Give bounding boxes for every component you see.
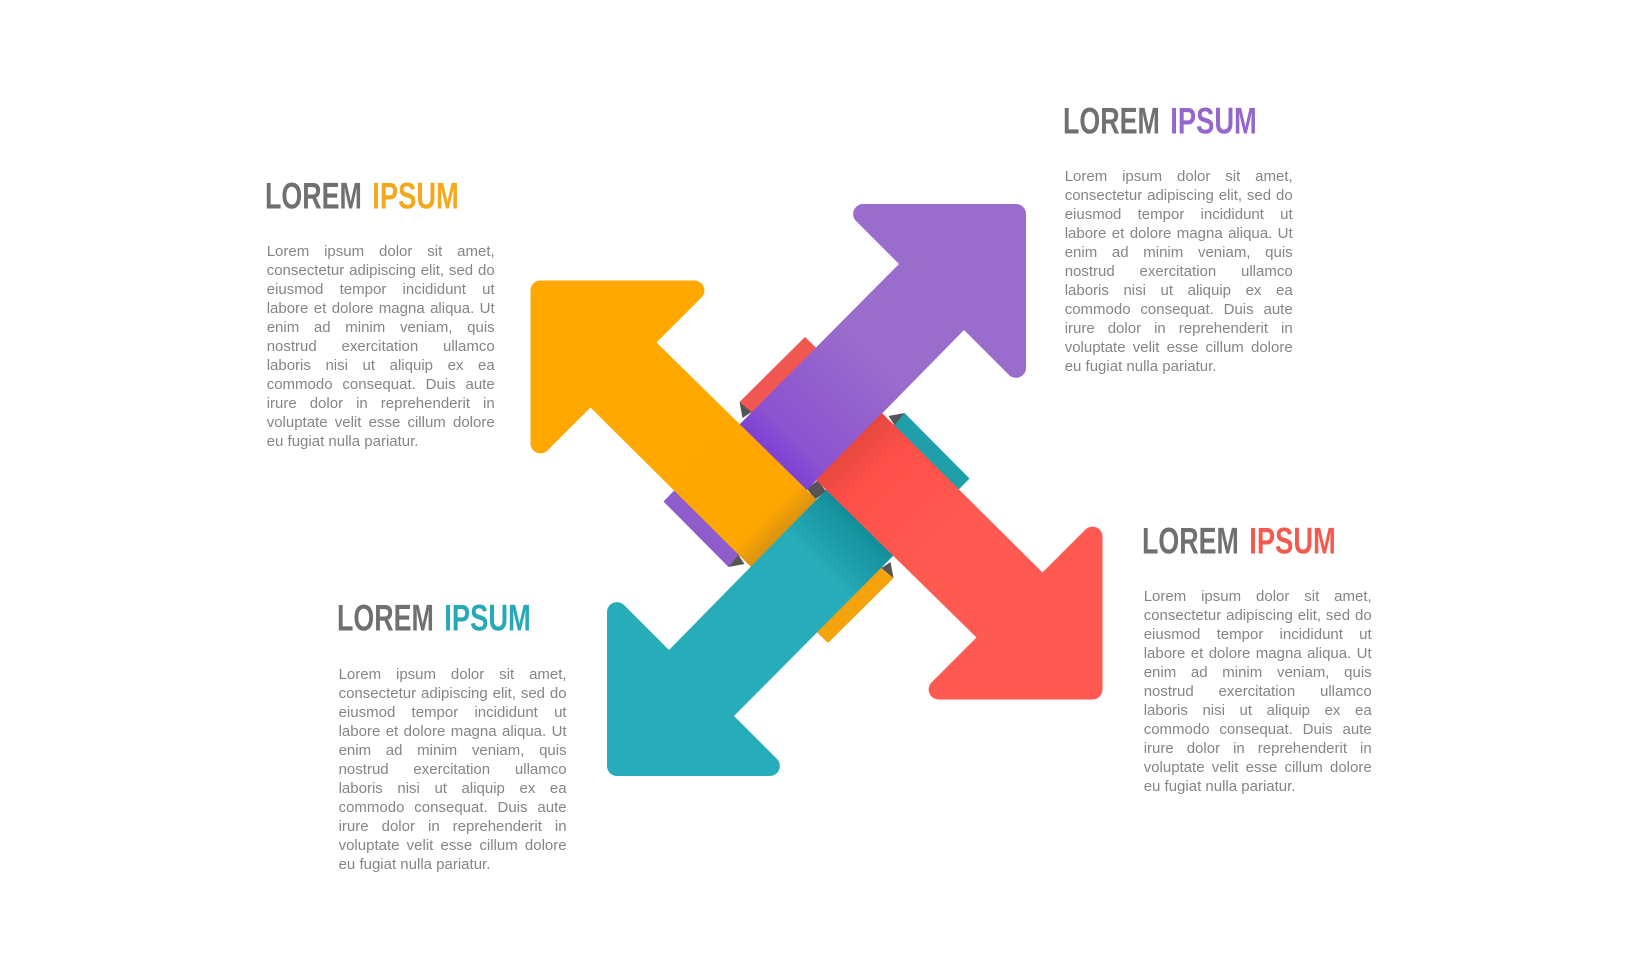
heading: LOREM [1063,100,1160,141]
body text: enim ad minim veniam, quis [1065,244,1293,261]
panel: red text block [1142,520,1372,795]
body text: enim ad minim veniam, quis [267,319,495,336]
body text: voluptate velit esse cillum dolore [339,837,567,854]
heading: IPSUM [444,598,530,639]
arrow: red, bottom right [816,413,1102,700]
heading [265,175,458,216]
heading [1063,100,1256,141]
folded strip: orange [812,562,894,643]
body text: enim ad minim veniam, quis [1144,664,1372,681]
folded strip: teal [888,413,970,495]
body text [1144,588,1372,795]
folded strip: red [740,337,822,418]
center shadow square [807,480,826,500]
body text: voluptate velit esse cillum dolore [1144,759,1372,776]
body text [266,243,495,450]
heading: LOREM [265,175,362,216]
body text: commodo consequat. Duis aute [1144,721,1372,738]
body text: nostrud exercitation ullamco [339,761,567,778]
teal arrow shape [607,490,894,776]
body text: irure dolor in reprehenderit in [1065,320,1293,337]
body text: consectetur adipiscing elit, sed do [1144,607,1372,624]
heading: IPSUM [1170,100,1256,141]
body text: eu fugiat nulla pariatur. [1144,778,1295,795]
panel: orange text block [265,175,495,450]
body text: enim ad minim veniam, quis [339,742,567,759]
body text: commodo consequat. Duis aute [267,376,495,393]
body text [338,666,567,873]
body text: irure dolor in reprehenderit in [1144,740,1372,757]
heading [1142,520,1335,561]
arrow: teal, bottom left [607,490,894,776]
body text: consectetur adipiscing elit, sed do [339,685,567,702]
heading: IPSUM [1249,520,1335,561]
body text: commodo consequat. Duis aute [1065,301,1293,318]
fold shadow [728,555,744,567]
red arrow shape [816,413,1102,700]
body text: consectetur adipiscing elit, sed do [267,262,495,279]
arrow: orange, top left [530,280,817,567]
body text: nostrud exercitation ullamco [1065,263,1293,280]
body text: voluptate velit esse cillum dolore [1065,339,1293,356]
body text: eu fugiat nulla pariatur. [267,433,418,450]
body text: Lorem ipsum dolor sit amet, [1144,588,1372,605]
arrow: purple, top right [740,204,1026,490]
panel: purple text block [1063,100,1293,375]
folded strip: purple [664,485,744,567]
body text: laboris nisi ut aliquip ex ea [1144,702,1372,719]
body text: laboris nisi ut aliquip ex ea [1065,282,1293,299]
body text: eiusmod tempor incididunt ut [1144,626,1372,643]
fold shadow [882,562,894,578]
heading [337,598,530,639]
body text: Lorem ipsum dolor sit amet, [339,666,567,683]
body text: labore et dolore magna aliqua. Ut [339,723,567,740]
body text: laboris nisi ut aliquip ex ea [339,780,567,797]
body text: irure dolor in reprehenderit in [339,818,567,835]
body text: eiusmod tempor incididunt ut [339,704,567,721]
body text: eu fugiat nulla pariatur. [1065,358,1216,375]
body text: consectetur adipiscing elit, sed do [1065,187,1293,204]
body text: voluptate velit esse cillum dolore [267,414,495,431]
orange arrow shape [530,280,817,567]
body text: nostrud exercitation ullamco [1144,683,1372,700]
body text: nostrud exercitation ullamco [267,338,495,355]
panel: teal text block [337,598,567,873]
body text: eiusmod tempor incididunt ut [1065,206,1293,223]
body text: Lorem ipsum dolor sit amet, [267,243,495,260]
body text: labore et dolore magna aliqua. Ut [267,300,495,317]
body text: eu fugiat nulla pariatur. [339,856,490,873]
purple arrow shape [740,204,1026,490]
body text: commodo consequat. Duis aute [339,799,567,816]
heading: LOREM [337,598,433,639]
body text: labore et dolore magna aliqua. Ut [1144,645,1372,662]
body text: eiusmod tempor incididunt ut [267,281,495,298]
fold shadow [740,402,752,418]
heading: IPSUM [372,175,458,216]
body text: labore et dolore magna aliqua. Ut [1065,225,1293,242]
heading: LOREM [1142,520,1239,561]
body text: laboris nisi ut aliquip ex ea [267,357,495,374]
body text [1064,168,1293,375]
fold shadow [888,413,904,425]
body text: Lorem ipsum dolor sit amet, [1065,168,1293,185]
body text: irure dolor in reprehenderit in [267,395,495,412]
